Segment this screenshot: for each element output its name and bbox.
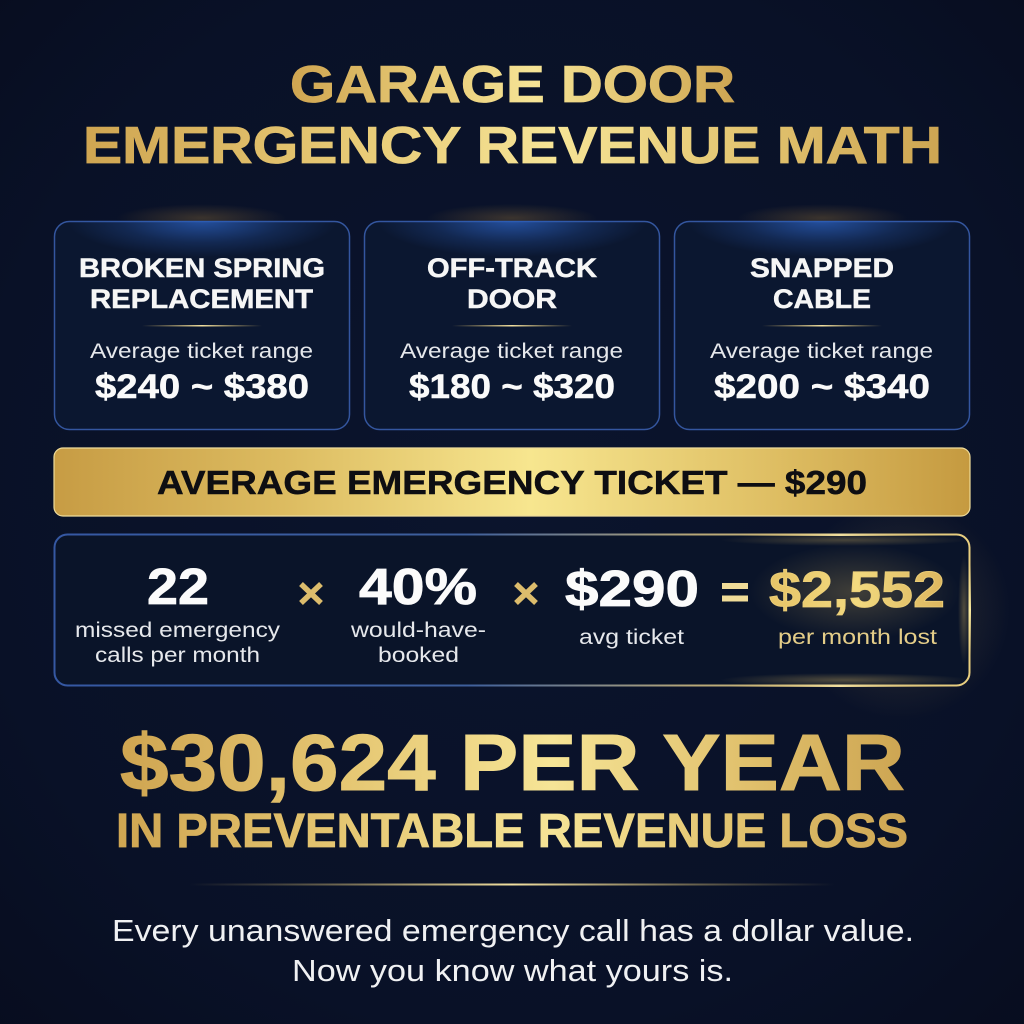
panel: off-track door (364, 185, 660, 430)
panel: snapped cable: CABLE (773, 284, 871, 314)
panel: snapped cable: Average ticket range (710, 340, 933, 363)
equation term: missed calls: 22 (147, 558, 209, 615)
equation term: average ticket (565, 560, 699, 649)
headline: annual loss (116, 718, 908, 858)
equation result: monthly loss: $2,552 (769, 561, 945, 618)
equation term: would have booked: would-have- (350, 619, 486, 642)
panel: snapped cable: SNAPPED (750, 253, 894, 283)
title: EMERGENCY REVENUE MATH (83, 117, 942, 175)
title (83, 56, 942, 175)
banner: average emergency ticket: AVERAGE EMERGENCY TICKET — $290 (157, 464, 867, 501)
equals sign (722, 586, 748, 598)
closing message: Now you know what yours is. (292, 953, 733, 988)
panel: broken spring replacement (54, 185, 350, 430)
panel: revenue equation (54, 500, 1010, 720)
equation term: average ticket: avg ticket (579, 626, 684, 649)
panel: snapped cable (674, 185, 970, 430)
multiply sign (301, 584, 321, 603)
equation term: missed calls: missed emergency (75, 619, 281, 642)
panel: broken spring replacement: Average ticket range (90, 340, 313, 363)
banner: average emergency ticket (54, 448, 970, 516)
multiply sign (516, 584, 536, 603)
headline: annual loss: $30,624 PER YEAR (120, 718, 905, 807)
panel: off-track door: DOOR (467, 284, 557, 314)
equation term: would have booked: 40% (359, 558, 477, 615)
panel: snapped cable: $200 ~ $340 (714, 368, 930, 406)
title: GARAGE DOOR (290, 56, 735, 114)
equation term: missed calls (75, 558, 281, 667)
panel: broken spring replacement: $240 ~ $380 (95, 368, 309, 406)
equation term: average ticket: $290 (565, 560, 699, 617)
equation term: would have booked (350, 558, 486, 667)
closing message (112, 913, 914, 988)
panel: broken spring replacement: REPLACEMENT (90, 284, 314, 314)
headline: annual loss: IN PREVENTABLE REVENUE LOSS (116, 805, 908, 858)
panel: broken spring replacement: BROKEN SPRING (79, 253, 325, 283)
equation term: missed calls: calls per month (95, 644, 260, 667)
panel: off-track door: Average ticket range (400, 340, 623, 363)
panel: off-track door: OFF-TRACK (427, 253, 598, 283)
closing message: Every unanswered emergency call has a dollar value. (112, 913, 914, 948)
equation term: would have booked: booked (378, 644, 459, 667)
panel: off-track door: $180 ~ $320 (409, 368, 615, 406)
equation result: monthly loss: per month lost (778, 626, 937, 649)
equation result: monthly loss (769, 561, 945, 649)
